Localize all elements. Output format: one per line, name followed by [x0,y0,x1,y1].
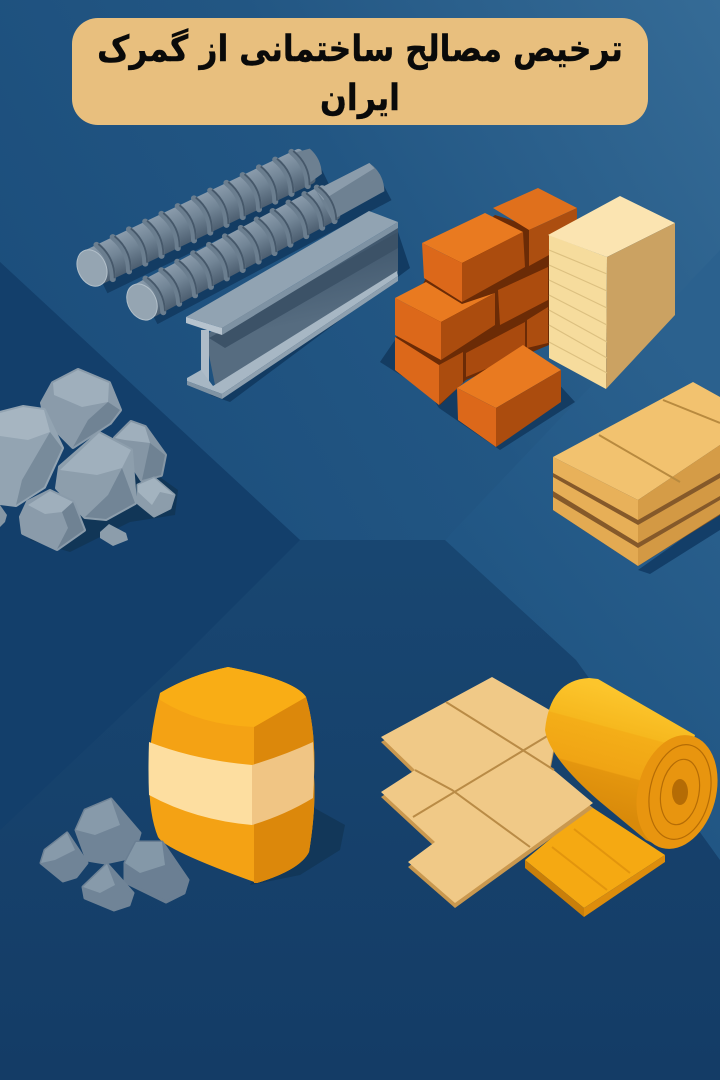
icon: cement bag [148,667,345,885]
icon: rebar upper [71,143,327,291]
icon: stacked boards [553,382,720,574]
board layer 2 [553,477,720,543]
brick back top [493,188,577,266]
icon: insulation mat [525,806,665,917]
icon: insulation roll [545,678,720,858]
cream band [148,742,314,825]
rock C [57,433,135,519]
rock F [21,491,84,549]
stone B [41,833,87,881]
rock D [115,422,165,480]
rock G [100,524,128,546]
rock H [0,505,7,527]
icon: brick wall [380,188,577,450]
rock B [0,407,62,505]
bricks back mortar [395,215,549,405]
brick top front [422,213,525,302]
board layer 3 [553,497,720,566]
bag right face [254,697,314,883]
title text: ترخیص مصالح ساختمانی از گمرک [97,28,623,71]
icon: rebar lower [121,158,389,325]
roll end [624,726,720,858]
icon: insulation block [548,196,675,389]
brick middle left [395,282,495,360]
brick front [457,345,561,447]
bag top [160,667,306,727]
icon: floor tiles [381,677,593,908]
title text: ایران [320,77,400,120]
icon: gravel pile [0,370,178,552]
board layer 1 [553,382,720,520]
stone C [125,842,188,902]
title banner [72,18,648,125]
icon: steel I-beam [186,211,410,402]
stone D [83,864,133,910]
stone A [76,799,140,863]
brick bottom left [395,337,463,405]
bag body [149,667,314,883]
icon: gravel beside bag [41,799,188,910]
bricks middle right [466,267,548,377]
rock E [138,478,174,516]
rock A [42,370,120,447]
